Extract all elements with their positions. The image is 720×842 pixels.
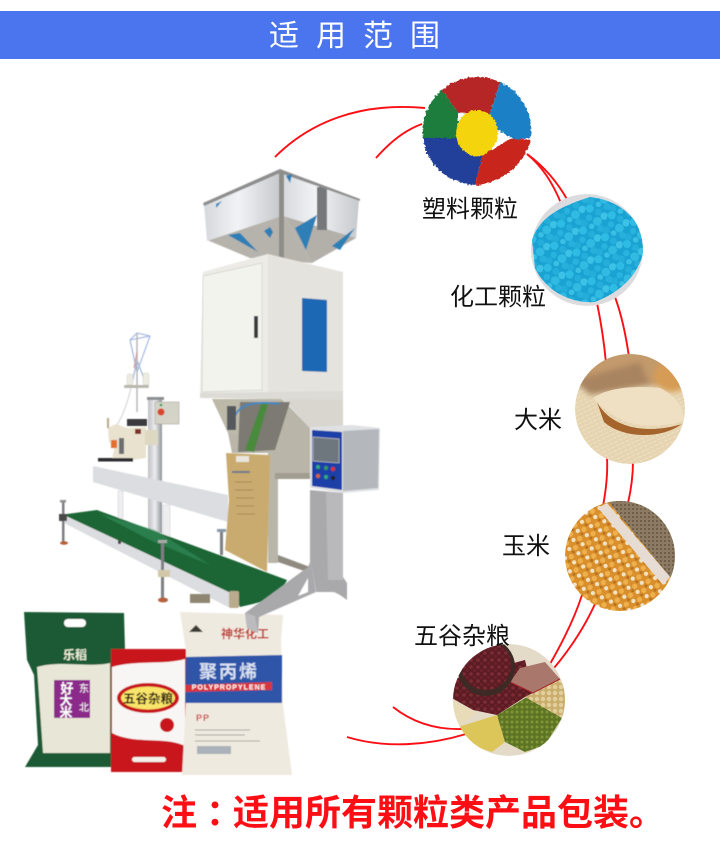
circle: mixed grains [453, 644, 565, 756]
circle: plastic pellets [423, 77, 531, 185]
machine support arm [245, 560, 316, 633]
red connector curves [275, 107, 633, 744]
circle: rice [575, 354, 685, 464]
white polypropylene bag [180, 612, 292, 775]
green rice bag: 米 [59, 705, 73, 720]
weighing cabinet [200, 254, 343, 400]
white polypropylene bag: 神华化工 [221, 626, 269, 641]
conveyor height adjusters [59, 500, 226, 602]
white polypropylene bag: POLYPROPYLENE [192, 684, 266, 692]
white polypropylene bag: PP [196, 713, 210, 723]
product bags [24, 612, 292, 775]
footnote: 注：适用所有颗粒类产品包装。 [161, 792, 665, 833]
label: rice: 大米 [514, 407, 562, 434]
thread stand [115, 333, 150, 428]
label: corn: 玉米 [502, 533, 550, 560]
packaging machine [59, 169, 380, 608]
green rice bag: 好 [60, 681, 74, 696]
control box [310, 425, 380, 493]
green rice bag [24, 612, 125, 767]
title: 适用范围 [269, 20, 457, 53]
hopper [203, 169, 360, 264]
label: chemical granules: 化工颗粒 [450, 284, 546, 311]
blue panel [302, 298, 327, 372]
white polypropylene bag: 聚丙烯 [199, 662, 259, 682]
label: plastic pellets: 塑料颗粒 [422, 196, 518, 223]
green rice bag: 大 [59, 693, 73, 708]
lower frame and hopper chute [212, 395, 343, 573]
backboard [93, 466, 228, 537]
conveyor belt [64, 510, 287, 608]
header banner [0, 11, 720, 59]
machine leg [310, 490, 347, 600]
paper sack [225, 453, 270, 572]
green rice bag: 乐稻 [63, 647, 87, 662]
circle: chemical granules [531, 194, 644, 306]
label: mixed grains: 五谷杂粮 [414, 623, 510, 650]
green rice bag: 东 [79, 682, 89, 695]
sewing unit column [147, 397, 179, 533]
sewing machine head [98, 418, 158, 462]
red grains bag: 五谷杂粮 [123, 691, 173, 706]
green rice bag: 北 [79, 702, 89, 714]
red grains bag [111, 649, 186, 772]
circle: corn [565, 500, 680, 611]
